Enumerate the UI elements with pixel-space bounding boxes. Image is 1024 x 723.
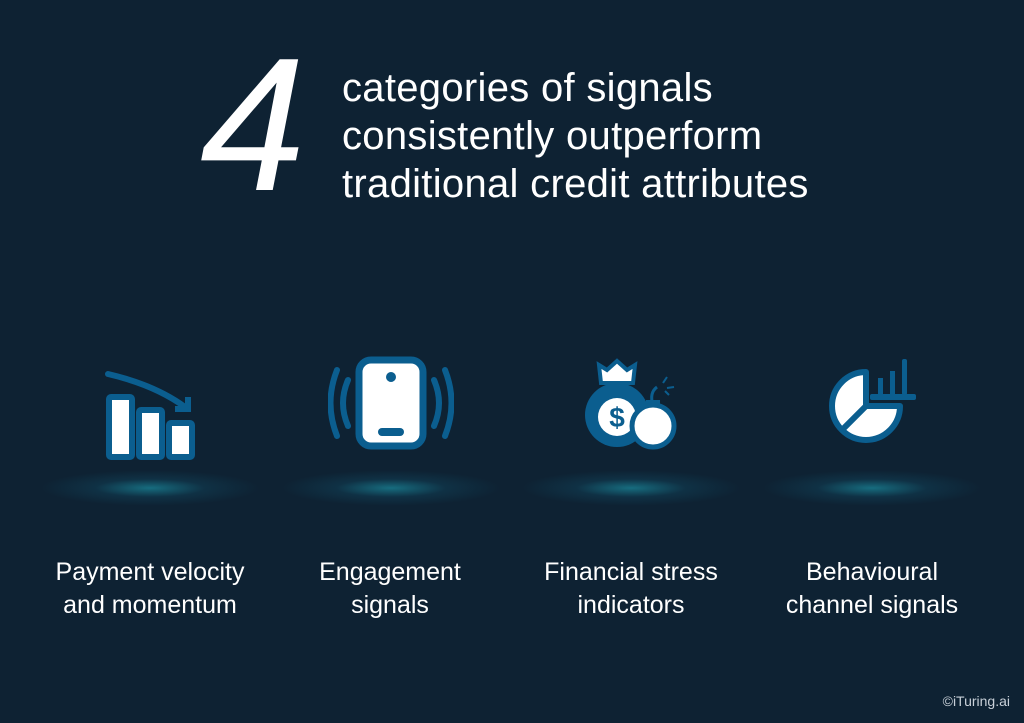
title text: traditional credit attributes — [342, 162, 809, 206]
label: payment velocity — [56, 558, 244, 619]
label: financial stress: Financial stress — [544, 558, 718, 586]
label: financial stress: indicators — [578, 591, 684, 619]
copyright: ©iTuring.ai — [943, 693, 1010, 709]
icon: money bag and bomb: $ — [609, 402, 625, 433]
glow: 1 — [40, 470, 260, 506]
label: payment velocity: Payment velocity — [56, 558, 244, 586]
label: behavioural — [786, 558, 958, 619]
label: engagement: Engagement — [319, 558, 461, 586]
label: behavioural: Behavioural — [806, 558, 938, 586]
title text: categories of signals — [342, 66, 713, 110]
glow: 3 — [521, 470, 741, 506]
title text — [342, 66, 809, 206]
label: payment velocity: and momentum — [63, 591, 237, 619]
icon: money bag and bomb — [585, 358, 676, 450]
label: behavioural: channel signals — [786, 591, 958, 619]
label: financial stress — [544, 558, 718, 619]
icon: pie chart with bars — [829, 359, 916, 443]
title number 4: 4 — [200, 19, 306, 231]
title text: consistently outperform — [342, 114, 762, 158]
label: engagement — [319, 558, 461, 619]
icon: declining bar chart — [105, 371, 195, 460]
icon: vibrating phone — [328, 356, 454, 450]
glow: 2 — [281, 470, 501, 506]
glow: 4 — [762, 470, 982, 506]
label: engagement: signals — [351, 591, 429, 619]
